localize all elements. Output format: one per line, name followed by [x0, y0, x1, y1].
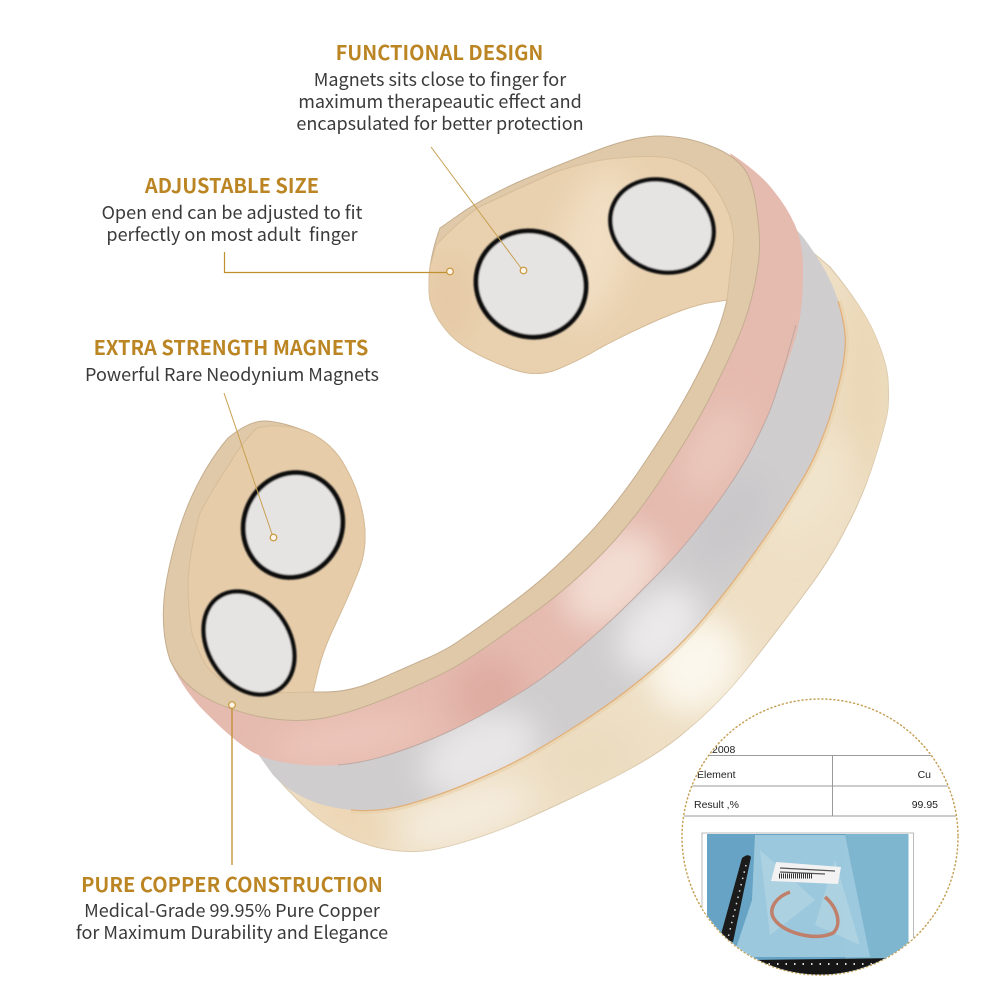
band: silver layer	[255, 200, 845, 817]
text block: extra strength magnets	[85, 332, 379, 387]
callout line: functional design	[431, 147, 527, 274]
results table: Cu	[918, 769, 931, 781]
text block: adjustable size: ADJUSTABLE SIZE	[144, 170, 319, 199]
text block: functional design: Magnets sits close to finger for	[314, 66, 567, 92]
text block: pure copper construction	[76, 869, 388, 945]
results table: 99.95	[912, 799, 938, 811]
callout line: extra strength magnets	[224, 393, 277, 541]
callout line: adjustable size	[224, 252, 453, 275]
text block: functional design: FUNCTIONAL DESIGN	[336, 37, 543, 66]
band: rose gold layer	[172, 153, 803, 774]
plastic bag	[733, 835, 870, 957]
results table: Result ,%	[694, 799, 739, 811]
label	[771, 862, 841, 884]
text block: pure copper construction: for Maximum Durability and Elegance	[76, 919, 388, 945]
text block: functional design	[296, 37, 584, 136]
text block: pure copper construction: PURE COPPER CONSTRUCTION	[81, 869, 383, 898]
inner face: bottom end	[188, 426, 365, 693]
magnet: bottom upper	[226, 456, 360, 594]
text block: functional design: maximum therapeautic effect and	[298, 88, 582, 114]
magnet: bottom lower	[185, 575, 313, 711]
inner face rim	[163, 136, 760, 720]
copper ring illustration	[163, 136, 893, 862]
text block: extra strength magnets: Powerful Rare Neodynium Magnets	[85, 361, 379, 387]
text block: adjustable size	[102, 170, 363, 247]
test photo	[702, 833, 914, 980]
magnet: top left	[459, 213, 603, 355]
text block: adjustable size: perfectly on most adult finger	[106, 221, 359, 247]
results table: Element	[697, 769, 736, 781]
rulers	[720, 855, 751, 942]
text block: extra strength magnets: EXTRA STRENGTH MAGNETS	[94, 332, 368, 361]
results table: 2008	[712, 744, 736, 756]
text block: pure copper construction: Medical-Grade 99.95% Pure Copper	[84, 897, 381, 923]
text block: adjustable size: Open end can be adjusted to fit	[102, 199, 363, 225]
results table	[680, 744, 960, 816]
small bracelet	[772, 892, 838, 936]
inner face: top end	[428, 156, 734, 374]
callout line: pure copper construction	[229, 702, 235, 865]
magnet: top right	[595, 163, 729, 289]
text block: functional design: encapsulated for better protection	[296, 110, 584, 136]
circular inset: lab certificate	[680, 699, 960, 980]
band: outer gold layer	[270, 250, 893, 862]
